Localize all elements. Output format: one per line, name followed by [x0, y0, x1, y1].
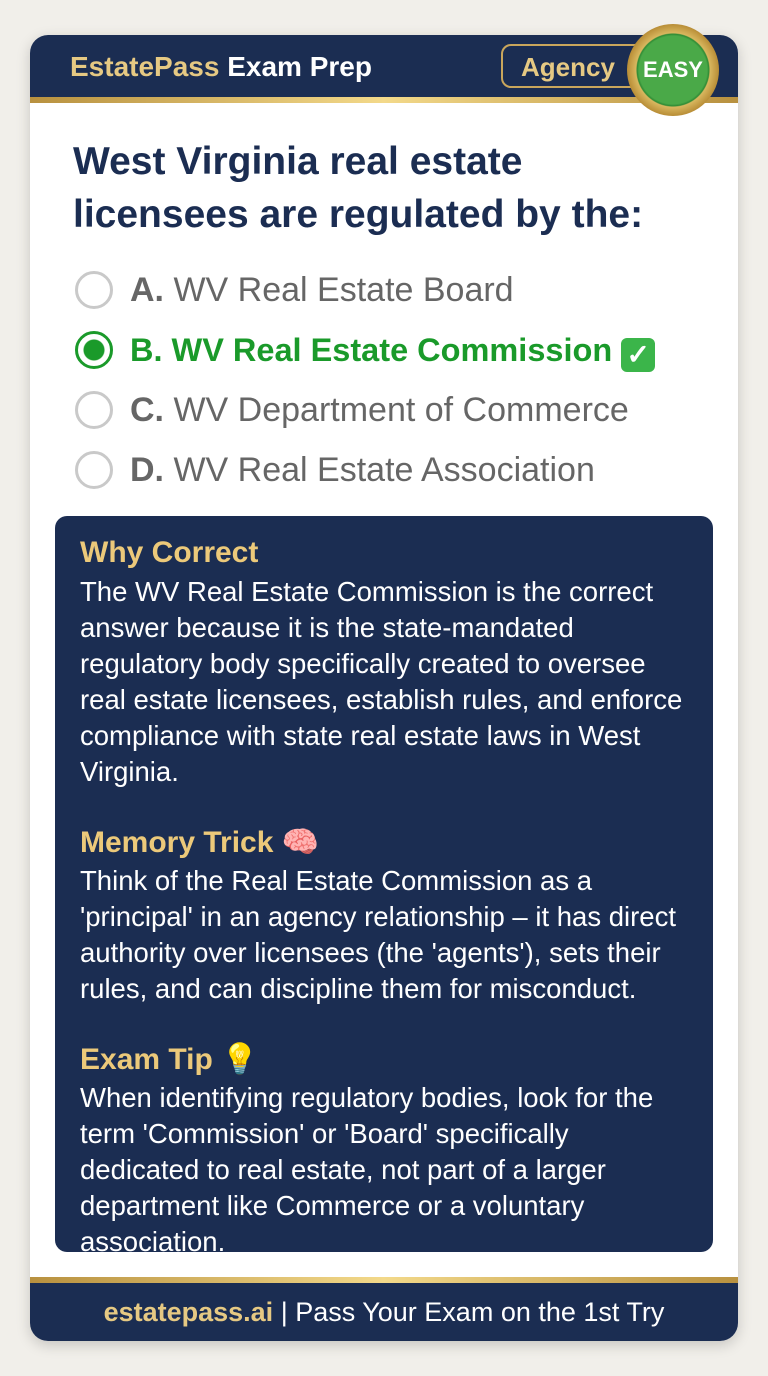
exam tip text: When identifying regulatory bodies, look for the [80, 1082, 653, 1113]
header bar [30, 35, 738, 98]
card: B. WV Real Estate Commission [130, 332, 612, 368]
why correct text: answer because it is the state-mandated [80, 612, 574, 643]
heading: exam tip: Exam Tip 💡 [80, 1043, 259, 1076]
brand title: EstatePass Exam Prep [70, 51, 372, 82]
card: ✓ [626, 339, 650, 370]
exam tip text: term 'Commission' or 'Board' specifically [80, 1118, 569, 1149]
why correct text: real estate licensees, establish rules, and enforce [80, 684, 682, 715]
why correct text [80, 576, 682, 787]
footer [30, 1283, 738, 1341]
memory trick text: rules, and can discipline them for misconduct. [80, 973, 636, 1004]
option B correct [75, 331, 655, 372]
card: D. WV Real Estate Association [130, 451, 595, 489]
why correct text: Virginia. [80, 756, 179, 787]
card: A. WV Real Estate Board [130, 271, 514, 309]
heading: memory trick: Memory Trick 🧠 [80, 826, 319, 859]
memory trick text: Think of the Real Estate Commission as a [80, 865, 592, 896]
question: West Virginia real estate [73, 140, 522, 183]
question: licensees are regulated by the: [73, 193, 643, 236]
agency tag [501, 44, 661, 88]
agency tag: Agency [521, 52, 615, 82]
why correct text: compliance with state real estate laws in West [80, 720, 640, 751]
footer: estatepass.ai | Pass Your Exam on the 1st Try [104, 1297, 664, 1327]
question [73, 140, 643, 236]
memory trick text: 'principal' in an agency relationship – it has direct [80, 901, 676, 932]
option D [75, 451, 595, 489]
option A [75, 271, 514, 309]
badge: easy [627, 24, 719, 116]
exam tip text: department like Commerce or a voluntary [80, 1190, 584, 1221]
memory trick text [80, 865, 676, 1004]
why correct text: regulatory body specifically created to oversee [80, 648, 646, 679]
heading: why correct: Why Correct [80, 536, 258, 569]
badge: easy: EASY [643, 57, 703, 82]
option C [75, 391, 629, 429]
why correct text: The WV Real Estate Commission is the correct [80, 576, 653, 607]
exam tip text: dedicated to real estate, not part of a larger [80, 1154, 606, 1185]
explanation panel [55, 516, 713, 1252]
card: C. WV Department of Commerce [130, 391, 629, 429]
exam tip text [80, 1082, 653, 1252]
memory trick text: authority over licensees (the 'agents'), sets their [80, 937, 661, 968]
